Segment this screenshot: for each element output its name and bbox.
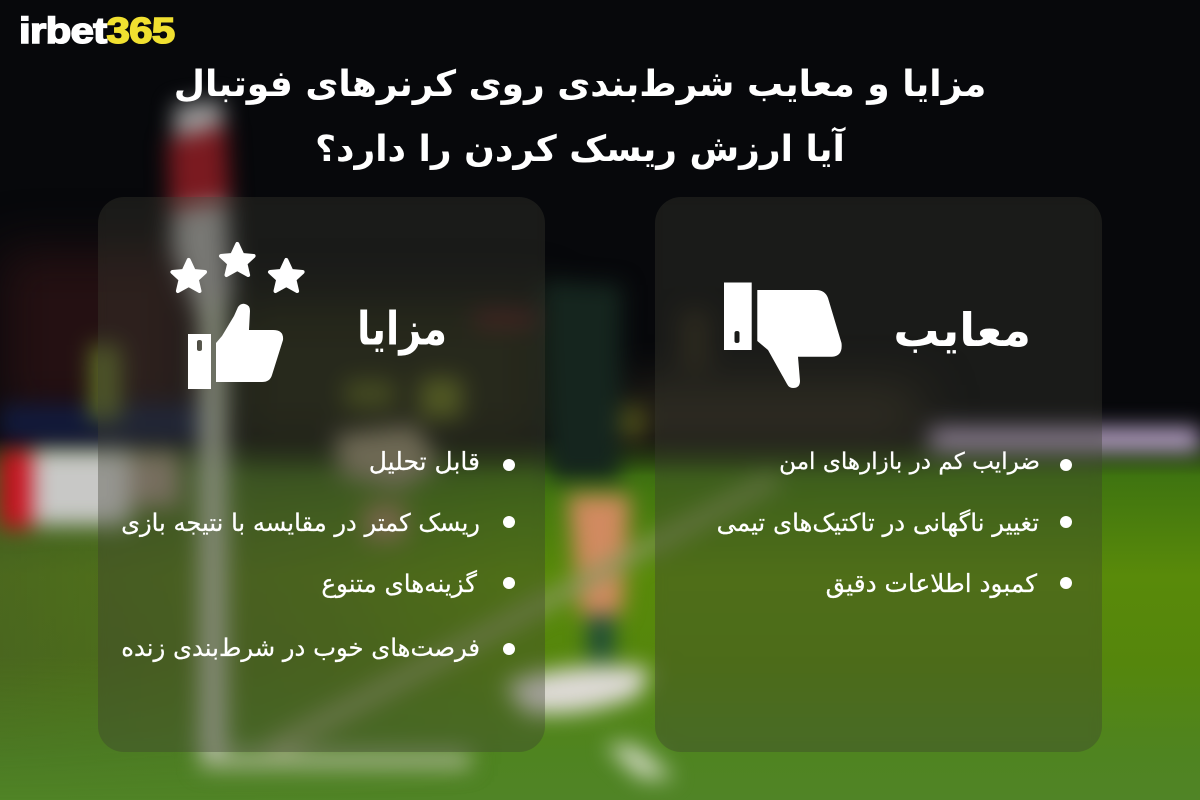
panel: advantages <box>98 197 545 752</box>
flag and post <box>172 100 232 315</box>
list item 2: ریسک کمتر در مقایسه با نتیجه بازی <box>121 509 480 537</box>
icon: three stars <box>170 242 305 294</box>
heading: disadvantages: معایب <box>893 303 1031 357</box>
list item 3: کمبود اطلاعات دقیق <box>826 569 1037 598</box>
list: disadvantages <box>717 449 1072 598</box>
title: مزایا و معایب شرط‌بندی روی کرنرهای فوتبال <box>174 64 986 105</box>
list item 1: ضرایب کم در بازارهای امن <box>779 449 1040 475</box>
crowd <box>0 250 190 420</box>
kicked player background <box>335 425 440 490</box>
panel: disadvantages <box>655 197 1102 752</box>
list item 4: فرصت‌های خوب در شرط‌بندی زنده <box>121 633 480 662</box>
advertising board <box>0 450 32 528</box>
icon: thumbs up <box>188 304 284 389</box>
heading: advantages: مزایا <box>357 302 447 356</box>
list item 2: تغییر ناگهانی در تاکتیک‌های تیمی <box>717 508 1039 537</box>
list item 3: گزینه‌های متنوع <box>321 569 477 598</box>
main player <box>542 280 622 480</box>
logo: irbet365: irbet365 <box>19 10 175 51</box>
list item 1: قابل تحلیل <box>369 447 480 476</box>
pitch lines <box>260 475 782 752</box>
icon: thumbs down <box>724 282 842 388</box>
title <box>174 64 986 170</box>
title: آیا ارزش ریسک کردن را دارد؟ <box>315 129 845 170</box>
list: advantages <box>121 447 515 662</box>
